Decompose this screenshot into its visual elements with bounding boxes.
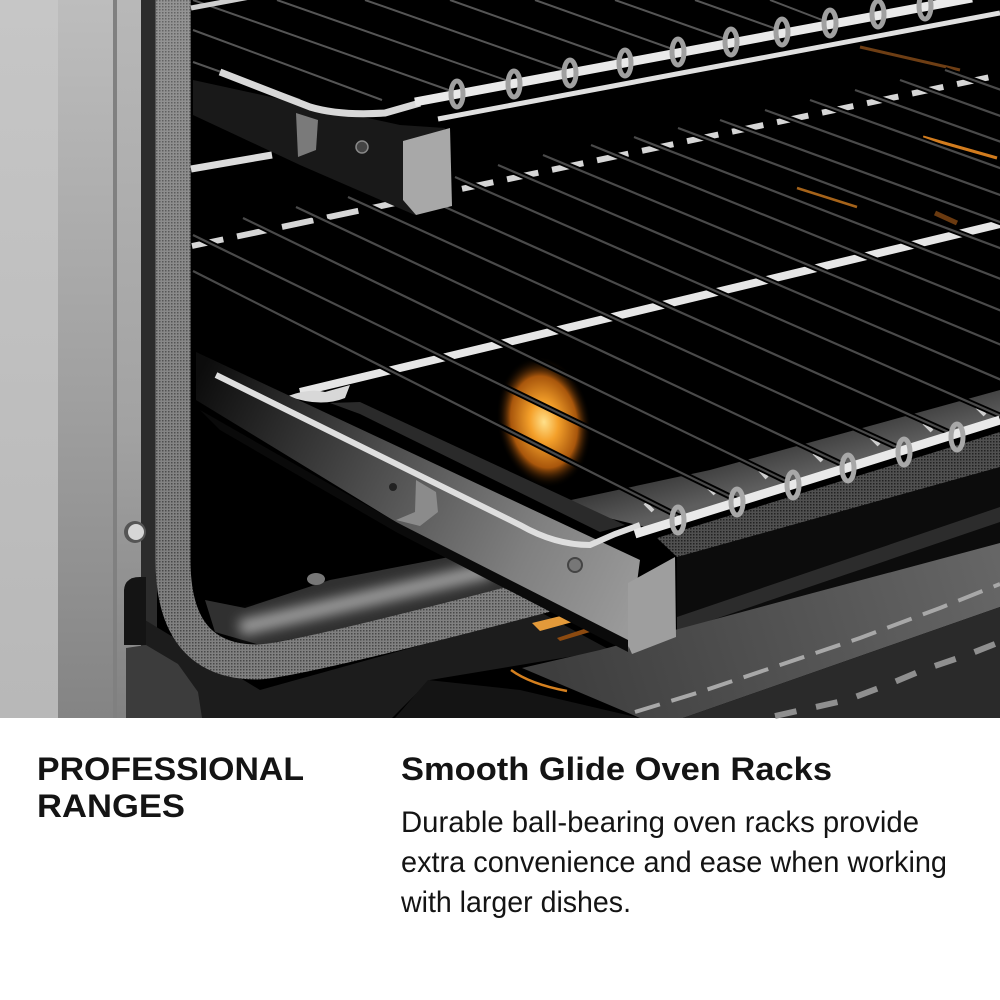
top rack slide rail [193, 72, 452, 215]
lower slide rail [196, 352, 676, 654]
top rail end cap [403, 128, 452, 215]
feature description [400, 806, 947, 919]
top left chrome bar stub [191, 0, 250, 8]
feature description: Durable ball-bearing oven racks provide [401, 806, 919, 839]
door frame [0, 0, 157, 718]
rail screw [389, 483, 397, 491]
oven floor pan [205, 553, 530, 645]
door rim [677, 507, 1000, 632]
top rack lower flat bar [438, 13, 1000, 119]
left heading: product line [37, 751, 304, 824]
orange burner glints [511, 47, 997, 691]
top rail screw [356, 141, 368, 153]
top chrome rail handle [220, 72, 420, 114]
top rail bracket [296, 113, 318, 157]
rail end cap [628, 557, 676, 654]
feature description: with larger dishes. [400, 886, 631, 919]
tray strip above chrome rail [330, 402, 625, 532]
middle rack rear bar [192, 75, 1000, 246]
lower door cavity shape [395, 680, 640, 718]
rear chrome bar stub [191, 155, 272, 169]
rail bracket [396, 480, 438, 526]
tray stubs [645, 407, 985, 511]
door hinge [126, 645, 202, 718]
top rack rungs [193, 0, 830, 100]
door gasket [156, 0, 545, 662]
rail bolt [568, 558, 582, 572]
lower rack rungs [193, 70, 1000, 517]
oven flame [486, 349, 602, 495]
top rack front bar [415, 0, 972, 107]
far gasket segment [657, 432, 1000, 557]
dark floor under gasket [145, 612, 610, 718]
pan screw [307, 573, 325, 585]
glass door panel [522, 543, 1000, 718]
photo: oven interior [0, 0, 1000, 718]
lower rack front bar [635, 420, 1000, 534]
hinge slot [124, 577, 146, 645]
oven cavity [140, 0, 1000, 718]
cross bar end clip [288, 385, 350, 403]
chrome rail handle [216, 375, 640, 545]
left heading: product line: PROFESSIONAL [37, 751, 304, 787]
frame screw [124, 521, 146, 543]
feature description: extra convenience and ease when working [401, 846, 947, 879]
dark zone below gasket [677, 467, 1000, 655]
feature heading: Smooth Glide Oven Racks [401, 751, 832, 787]
middle cross bar [300, 224, 1000, 392]
left heading: product line: RANGES [37, 788, 185, 824]
lower slide tray [571, 390, 1000, 528]
